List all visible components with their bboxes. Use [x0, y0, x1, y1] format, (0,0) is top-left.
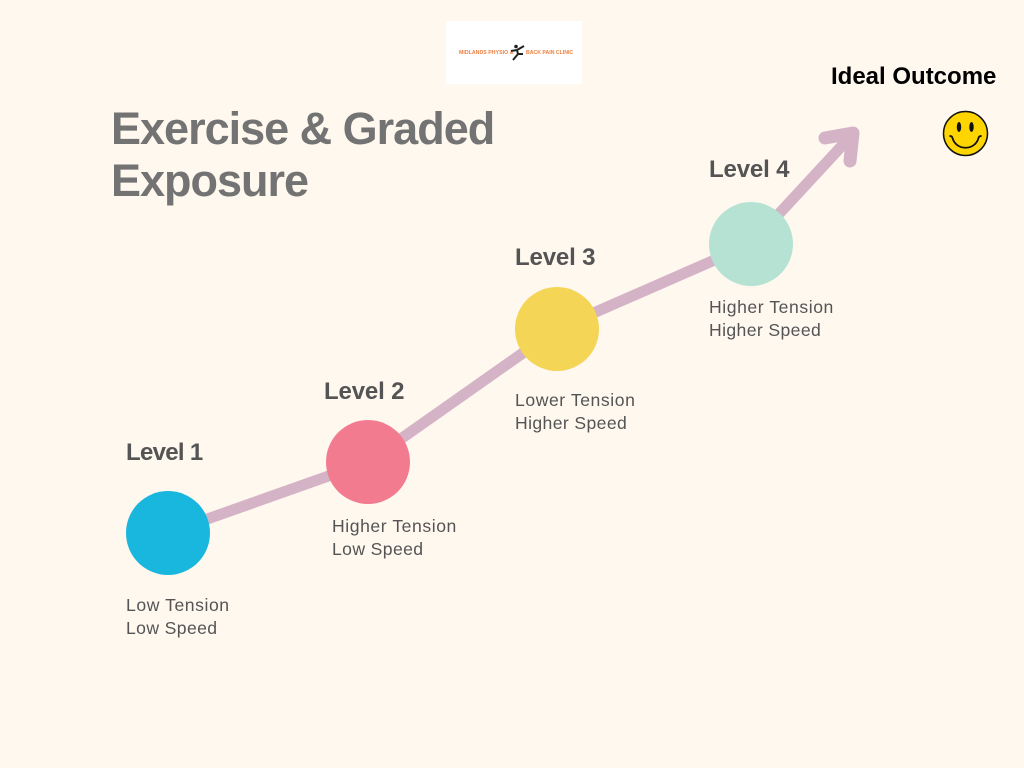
arrow line	[168, 133, 853, 533]
level 4 heading: Level 4	[709, 156, 789, 182]
circle: level 1	[126, 491, 210, 575]
level 4 description: Higher Speed	[709, 320, 821, 340]
level 1 description: Low Speed	[126, 618, 217, 638]
logo figure icon	[510, 44, 524, 61]
ideal outcome label: Ideal Outcome	[831, 63, 996, 90]
level 2 description: Higher Tension	[332, 516, 457, 536]
level 1 heading: Level 1	[126, 438, 202, 466]
level 3 description	[515, 390, 635, 432]
level 4 description	[709, 296, 834, 340]
level 2 description: Low Speed	[332, 539, 423, 559]
level 1 description: Low Tension	[126, 594, 230, 614]
title: Exercise & Graded	[111, 103, 494, 154]
logo text right: BACK PAIN CLINIC	[526, 50, 573, 56]
level 4 description: Higher Tension	[709, 296, 834, 316]
circle: level 4	[709, 202, 793, 286]
logo	[446, 21, 582, 84]
level 3 heading: Level 3	[515, 244, 595, 270]
title	[111, 103, 494, 206]
level 3 description: Higher Speed	[515, 412, 627, 432]
level 3 description: Lower Tension	[515, 390, 635, 410]
level 2 description	[332, 516, 457, 559]
title: Exposure	[111, 155, 308, 206]
circle: level 2	[326, 420, 410, 504]
circle: level 3	[515, 287, 599, 371]
level 2 heading: Level 2	[324, 378, 404, 404]
level 1 description	[126, 594, 230, 638]
logo text left: MIDLANDS PHYSIO &	[459, 50, 513, 56]
icon: smiley	[942, 110, 988, 156]
